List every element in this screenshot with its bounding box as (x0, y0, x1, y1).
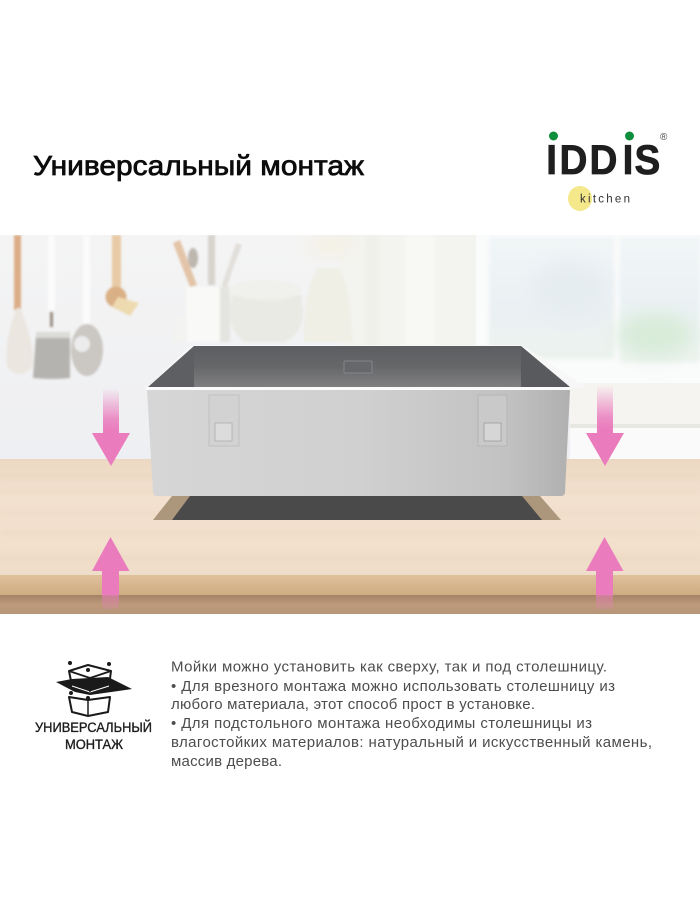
title: Универсальный монтаж (33, 150, 364, 181)
description text: массив дерева. (171, 753, 282, 770)
icon caption (35, 720, 152, 752)
photo: kitchen scene with sink (0, 235, 700, 614)
sink interior right wall (521, 346, 570, 387)
upper sink (69, 665, 111, 692)
description text: влагостойких материалов: натуральный и искусственный камень, (171, 734, 652, 751)
sink flange (363, 345, 540, 357)
hanging utensils (6, 235, 139, 379)
arrow: top left down (92, 388, 130, 466)
countertop lower edge (0, 595, 700, 614)
countertop grain (0, 474, 700, 560)
lower arrows (69, 691, 90, 700)
cut-out dark opening (172, 496, 542, 520)
icon caption: МОНТАЖ (65, 737, 124, 752)
window (476, 235, 700, 459)
arrow: top right down (586, 385, 624, 466)
kitchen yellow blob (568, 186, 592, 211)
countertop slab (56, 677, 132, 695)
sink drain overflow (344, 361, 372, 373)
sink (146, 345, 587, 496)
description text: • Для подстольного монтажа необходимы столешницы из (171, 715, 592, 732)
icon: universal mounting (56, 661, 132, 716)
countertop surface (0, 459, 700, 576)
logo dots (549, 132, 634, 140)
upper sink white front edges (72, 686, 109, 692)
description text: Мойки можно установить как сверху, так и под столешницу. (171, 658, 607, 676)
arrow: bottom left up (92, 537, 130, 609)
arrow: bottom right up (586, 537, 624, 609)
sink front body (147, 390, 570, 496)
sink interior left wall (148, 346, 194, 387)
cut-out chipboard sides (153, 496, 192, 520)
kitchen wall background (0, 235, 570, 459)
lower sink corner (87, 700, 89, 716)
description text (171, 658, 652, 770)
description text: любого материала, этот способ прост в установке. (171, 696, 535, 713)
icon caption: УНИВЕРСАЛЬНЫЙ (35, 720, 152, 735)
sink front rim (146, 387, 476, 390)
countertop front edge (0, 575, 700, 595)
upper sink rim (69, 671, 111, 678)
kitchen word: kitchen (580, 194, 630, 206)
utensil holder and tableware (173, 235, 352, 342)
right mounting clip (478, 395, 507, 446)
registered mark: ® (660, 132, 668, 143)
sink interior back wall (194, 346, 521, 387)
logo wordmark: IDDIS (546, 135, 660, 183)
logo: IDDIS kitchen (546, 132, 668, 211)
countertop cut-out (153, 496, 561, 520)
left mounting clip (209, 395, 239, 446)
description text: • Для врезного монтажа можно использовать столешницу из (171, 678, 615, 695)
upper arrows (68, 661, 111, 672)
lower sink (69, 697, 110, 716)
